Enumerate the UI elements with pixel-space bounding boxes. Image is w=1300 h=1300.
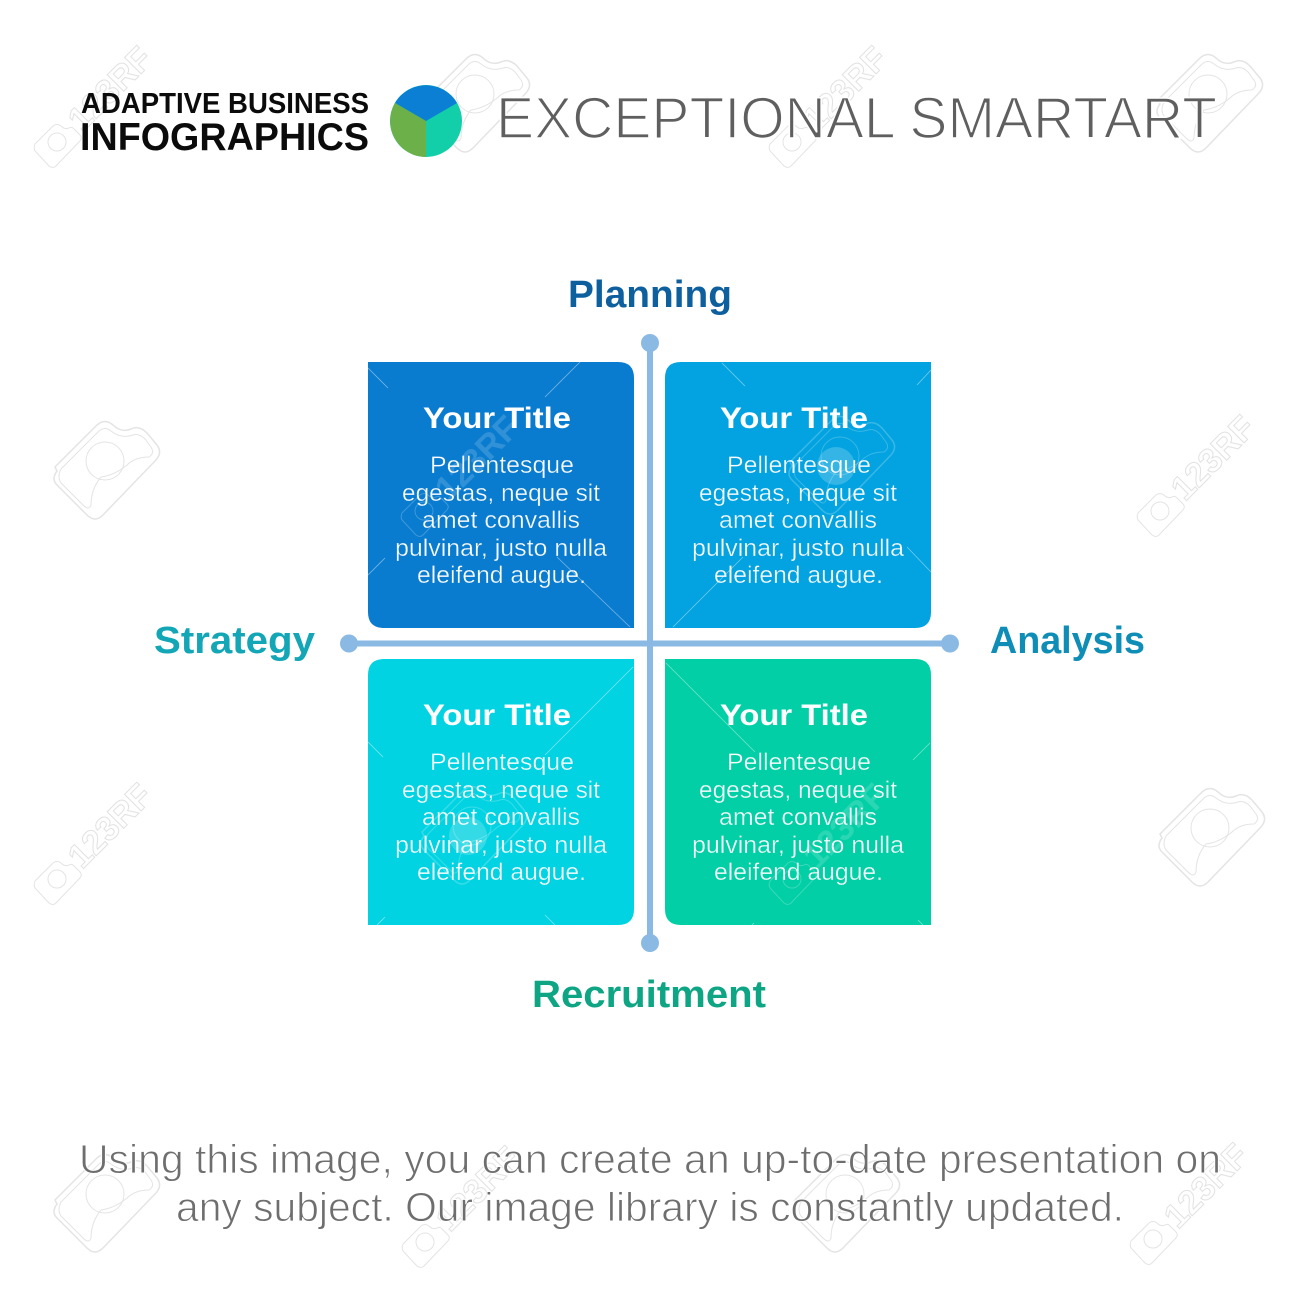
panel text: pulvinar, justo nulla — [395, 535, 608, 562]
panel text: egestas, neque sit — [402, 480, 600, 507]
panel text: Pellentesque — [430, 749, 574, 776]
panel heading: Your Title — [423, 402, 571, 435]
logo heading: ADAPTIVE BUSINESS — [81, 88, 369, 120]
watermark layer: 123RF — [796, 40, 895, 139]
panel text — [395, 749, 608, 886]
panel: bottom right — [665, 659, 931, 925]
label: Recruitment: Recruitment — [532, 974, 766, 1016]
footer text: Using this image, you can create an up-to-date presentation on — [79, 1136, 1221, 1182]
logo heading: INFOGRAPHICS — [80, 116, 369, 159]
panel text — [692, 749, 905, 886]
watermark layer: 123RF — [61, 40, 160, 139]
panel text: pulvinar, justo nulla — [692, 535, 905, 562]
panel: bottom left — [368, 659, 634, 925]
panel text: eleifend augue. — [714, 859, 883, 886]
panel text — [395, 452, 608, 589]
panel text — [692, 452, 905, 589]
watermark on panels: 123RF — [428, 409, 527, 508]
panel text: amet convallis — [719, 804, 877, 831]
panel text: amet convallis — [719, 507, 877, 534]
label: Strategy: Strategy — [154, 620, 315, 662]
panel text: amet convallis — [422, 804, 580, 831]
panel text: pulvinar, justo nulla — [395, 832, 608, 859]
label: Analysis: Analysis — [990, 620, 1145, 662]
panel text: amet convallis — [422, 507, 580, 534]
label: Planning: Planning — [568, 274, 732, 316]
panel text: eleifend augue. — [714, 562, 883, 589]
watermark layer: 123RF — [61, 777, 160, 876]
panel text: Pellentesque — [727, 749, 871, 776]
watermark on panels — [368, 362, 931, 925]
panel: top right — [665, 362, 931, 628]
watermark layer: 123RF — [1164, 409, 1263, 508]
watermark layer: 123RF — [429, 1140, 528, 1239]
footer text — [79, 1136, 1221, 1230]
icon: pie logo — [390, 85, 462, 157]
panel: top left — [368, 362, 634, 628]
panel text: egestas, neque sit — [699, 480, 897, 507]
panel text: egestas, neque sit — [402, 777, 600, 804]
panel text: eleifend augue. — [417, 859, 586, 886]
footer text: any subject. Our image library is constantly updated. — [176, 1184, 1124, 1230]
panel heading: Your Title — [720, 699, 868, 732]
panel text: egestas, neque sit — [699, 777, 897, 804]
panel text: eleifend augue. — [417, 562, 586, 589]
panel text: Pellentesque — [430, 452, 574, 479]
watermark on panels: 123RF — [796, 777, 895, 876]
title: EXCEPTIONAL SMARTART — [496, 86, 1217, 151]
panel text: pulvinar, justo nulla — [692, 832, 905, 859]
watermark layer: 123RF — [1157, 1137, 1256, 1236]
panel heading: Your Title — [423, 699, 571, 732]
logo heading — [80, 88, 369, 159]
axis cross — [340, 334, 959, 952]
panel heading: Your Title — [720, 402, 868, 435]
panel text: Pellentesque — [727, 452, 871, 479]
